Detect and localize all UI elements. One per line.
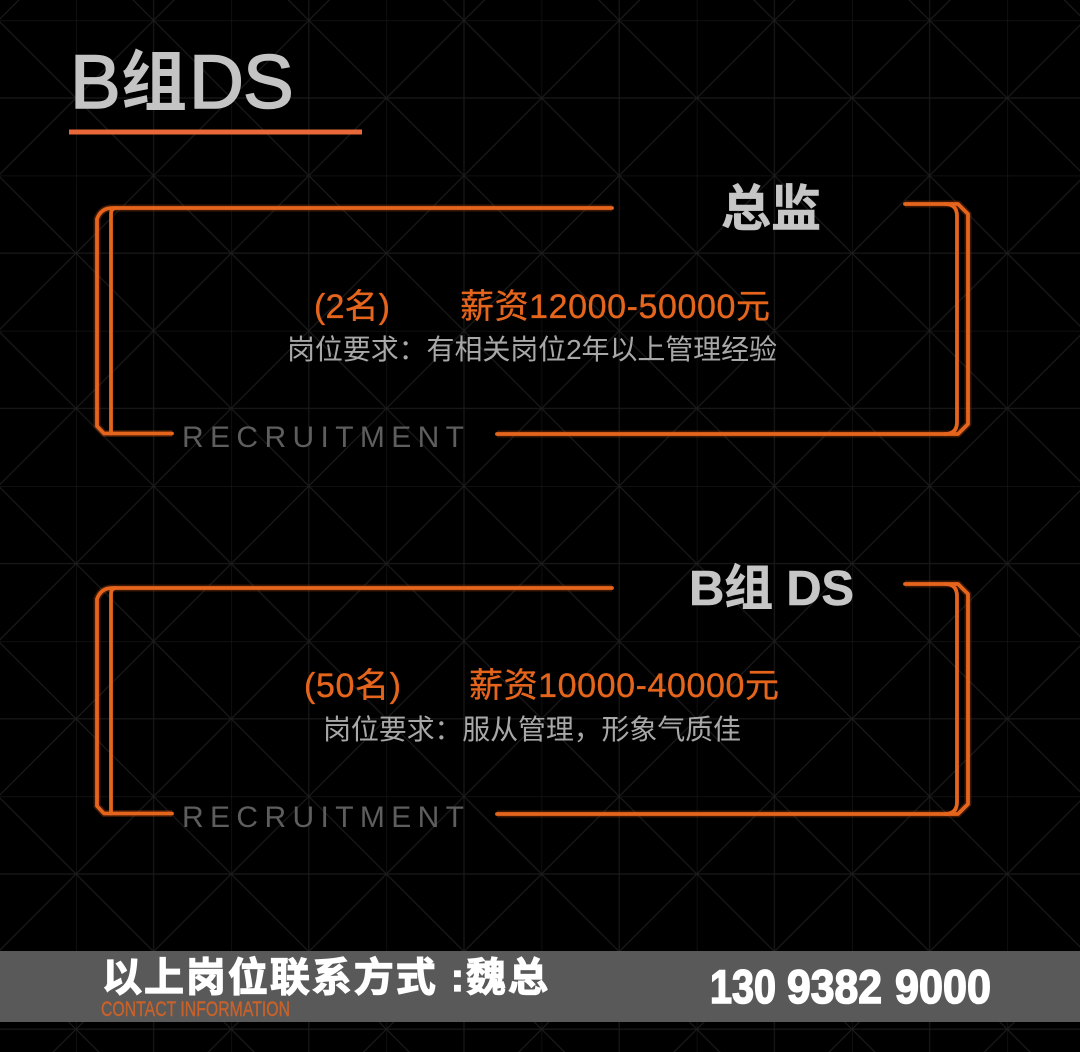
- title: S: [243, 40, 294, 125]
- contact subtitle: CONTACT INFORMATION: [101, 998, 290, 1021]
- requirement: group B DS: 岗位要求：服从管理，形象气质佳: [323, 714, 741, 745]
- requirement: director: 岗位要求：有相关岗位2年以上管理经验: [287, 334, 777, 365]
- contact bar: [0, 951, 1080, 1022]
- headcount: group B DS: (50名): [304, 667, 401, 705]
- headcount: director: (2名): [314, 288, 390, 326]
- phone number: 9000: [895, 960, 991, 1013]
- heading: group B DS: B组 DS: [689, 562, 854, 616]
- contact heading: 以上岗位联系方式 :魏总: [102, 956, 548, 1000]
- watermark: director: RECRUITMENT: [182, 421, 464, 454]
- frame: director bracket: [97, 204, 968, 434]
- panel: director: [97, 181, 968, 454]
- phone number: 130: [710, 960, 776, 1013]
- watermark: group B DS: RECRUITMENT: [182, 801, 464, 834]
- title: D: [189, 40, 244, 125]
- title: B: [70, 40, 121, 125]
- frame: group B bracket: [97, 584, 968, 814]
- title: 组: [121, 45, 187, 119]
- heading: director: 总监: [721, 181, 821, 237]
- panel: group B DS: [97, 562, 968, 834]
- salary: group B DS: 薪资10000-40000元: [469, 667, 779, 705]
- salary: director: 薪资12000-50000元: [460, 288, 770, 326]
- title: [69, 40, 362, 134]
- phone number: 9382: [787, 960, 882, 1013]
